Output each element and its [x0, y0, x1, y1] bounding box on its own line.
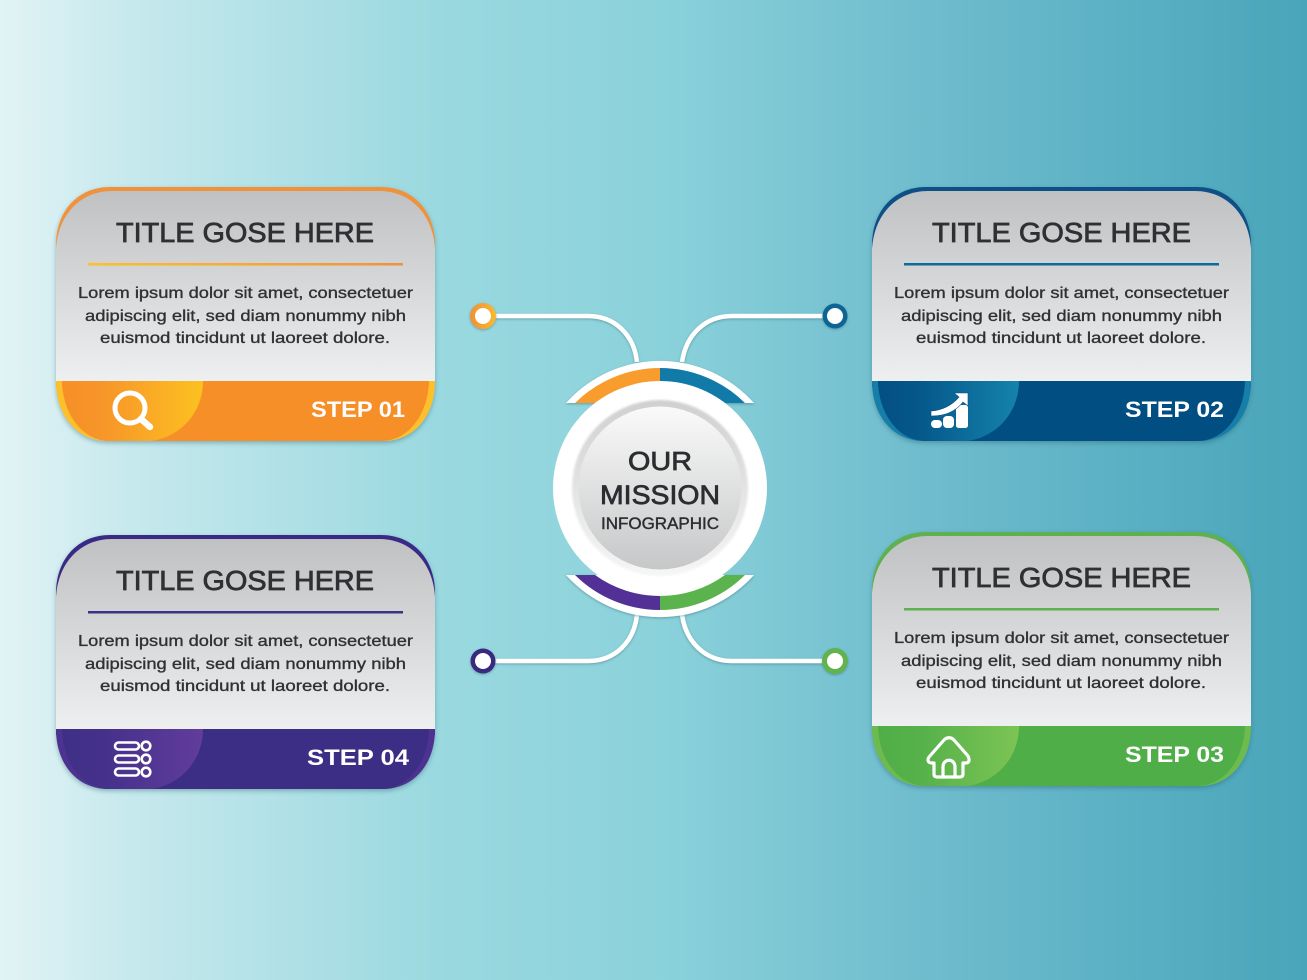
centre text: INFOGRAPHIC [601, 515, 719, 533]
body text: adipiscing elit, sed diam nonummy nibh [85, 308, 406, 325]
icon: list [115, 742, 150, 776]
white circle [553, 381, 767, 595]
footer band [62, 729, 429, 789]
card frame [56, 187, 435, 441]
footer lens [62, 729, 203, 789]
step label: STEP 02 [1125, 397, 1224, 422]
centre text: OUR [628, 446, 692, 476]
body text: adipiscing elit, sed diam nonummy nibh [901, 653, 1222, 670]
body text: euismod tincidunt ut laoreet dolore. [100, 678, 390, 695]
body text [78, 285, 414, 347]
footer band [62, 381, 429, 441]
central mission hub [553, 361, 767, 617]
body text: euismod tincidunt ut laoreet dolore. [916, 675, 1206, 692]
connector: top left [483, 316, 637, 362]
inner disc [578, 406, 742, 570]
heading: TITLE GOSE HERE [116, 217, 374, 248]
footer lens [62, 381, 203, 441]
body text: euismod tincidunt ut laoreet dolore. [100, 330, 390, 347]
connector lines [483, 316, 835, 661]
footer lens [878, 726, 1019, 786]
grey body [56, 539, 435, 729]
grey body [56, 191, 435, 381]
node: green [822, 648, 848, 674]
divider [88, 263, 403, 266]
card frame [56, 535, 435, 789]
body text: Lorem ipsum dolor sit amet, consectetuer [894, 285, 1230, 302]
node: orange [470, 303, 496, 329]
heading: TITLE GOSE HERE [116, 565, 374, 596]
icon: magnifier [115, 393, 150, 427]
footer band [878, 726, 1245, 786]
body text [894, 630, 1230, 692]
panel: step 01 [56, 187, 435, 441]
icon: house [928, 738, 969, 777]
body text: adipiscing elit, sed diam nonummy nibh [85, 656, 406, 673]
connector: bottom right [682, 615, 835, 661]
grey body [872, 536, 1251, 726]
body text [894, 285, 1230, 347]
bottom arc [566, 575, 754, 617]
top arc [566, 361, 754, 403]
footer lens [878, 381, 1019, 441]
icon: growth chart [931, 393, 968, 428]
divider [904, 608, 1219, 610]
step label: STEP 03 [1125, 742, 1224, 767]
grey body [872, 191, 1251, 381]
body text: Lorem ipsum dolor sit amet, consectetuer [78, 285, 414, 302]
centre text [600, 446, 720, 533]
card frame [872, 187, 1251, 441]
panel: step 02 [872, 187, 1251, 441]
heading: TITLE GOSE HERE [932, 217, 1191, 248]
divider [88, 611, 403, 614]
connector: top right [682, 316, 835, 362]
node: purple [470, 648, 496, 674]
body text: Lorem ipsum dolor sit amet, consectetuer [894, 630, 1230, 647]
panel: step 04 [56, 535, 435, 789]
card frame [872, 532, 1251, 786]
divider [904, 263, 1219, 266]
footer band [878, 381, 1245, 441]
body text: Lorem ipsum dolor sit amet, consectetuer [78, 633, 414, 650]
grey ring [572, 400, 748, 576]
step label: STEP 04 [307, 745, 410, 770]
step label: STEP 01 [311, 397, 405, 422]
connector: bottom left [483, 615, 637, 661]
body text: euismod tincidunt ut laoreet dolore. [916, 330, 1206, 347]
heading: TITLE GOSE HERE [932, 562, 1191, 593]
body text: adipiscing elit, sed diam nonummy nibh [901, 308, 1222, 325]
node: blue [822, 304, 848, 328]
body text [78, 633, 414, 695]
panel: step 03 [872, 532, 1251, 786]
centre text: MISSION [600, 480, 720, 510]
